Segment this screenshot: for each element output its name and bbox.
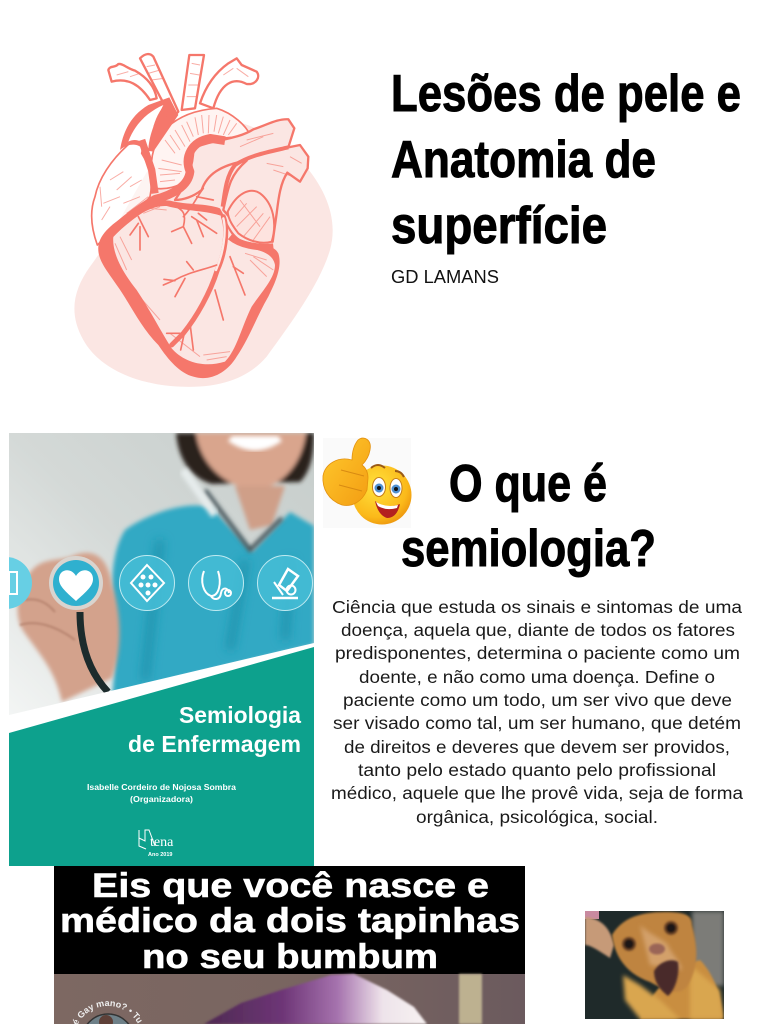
paragraph: definition of semiology: orgânica, psicológica, social. [416,807,658,827]
paragraph: definition of semiology: ser visado como tal, um ser humano, que detém [333,713,741,733]
meme caption: no seu bumbum [142,938,438,976]
heading: O que é semiologia [401,455,656,578]
meme caption panel [54,866,525,974]
heart illustration [74,54,333,387]
icon: left cropped circle [9,557,32,609]
dog muzzle shading [640,925,682,970]
dog eyes [622,921,678,951]
eyes [372,478,402,498]
title: superfície [391,197,607,255]
icon: microscope [258,556,312,610]
publisher logo [139,830,174,858]
paragraph: definition of semiology: paciente como um todo, um ser vivo que deve [343,690,732,710]
cover author: Isabelle Cordeiro de Nojosa Sombra [87,783,237,792]
thumb hand [323,438,370,505]
dog body [640,960,723,1019]
stethoscope tube [80,612,108,692]
heading: O que é semiologia: O que é [449,455,607,513]
title: Anatomia de [391,131,656,189]
cover photo background [9,433,314,723]
meme caption: médico da dois tapinhas [60,902,520,940]
eyebrows [371,465,404,477]
cover author [87,783,237,804]
white diagonal band [9,643,314,723]
paragraph: definition of semiology [331,597,743,827]
pulmonary trunk and left vessels [175,119,308,242]
cover title [128,702,301,757]
meme photo [54,974,525,1024]
title [391,65,741,255]
icon: pills [120,556,174,610]
hand [18,553,119,702]
ventricle wall [98,200,280,378]
paragraph: definition of semiology: de direitos e deveres que devem ser providos, [344,737,730,757]
nurse smile [228,436,282,450]
cover author: (Organizadora) [130,795,193,804]
teal panel [9,647,314,866]
meme caption: Eis que você nasce e [92,867,489,905]
central muscular band [105,138,225,240]
nurse hair and face [176,433,314,530]
publisher logo: Ano 2019 [148,852,172,858]
hatching [100,63,302,360]
icon: thumbs-up emoji [323,438,412,528]
heading: O que é semiologia: semiologia? [401,520,656,578]
paragraph: definition of semiology: doente, e não como uma doença. Define o [359,667,715,687]
dog paws [623,965,723,1019]
nurse uniform [112,505,314,695]
blob background [74,117,333,387]
paragraph: definition of semiology: médico, aquele que lhe provê vida, seja de forma [331,783,743,803]
icon: stethoscope [188,556,244,610]
meme caption [62,871,519,968]
cover title: Semiologia [179,702,301,728]
coronary arteries [130,188,245,350]
paragraph: definition of semiology: predisponentes, determina o paciente como um [335,643,740,663]
dog mouth [654,960,678,996]
paragraph: definition of semiology: Ciência que estuda os sinais e sintomas de uma [332,597,742,617]
book cover [0,433,314,866]
paragraph: definition of semiology: tanto pelo estado quanto pelo profissional [358,760,716,780]
publisher logo: tena [150,835,174,850]
cover title: de Enfermagem [128,731,301,757]
aortic arch [151,108,250,189]
dog photo [585,911,724,1019]
dog ear [585,917,614,958]
meme image [54,866,525,1024]
author: GD LAMANS [391,267,499,287]
dog head [612,912,696,992]
superior vena cava [120,97,178,152]
paragraph: definition of semiology: doença, aquela que, diante de todos os fatores [341,620,735,640]
great vessels [108,54,258,118]
right atrium [92,141,151,245]
left atrial appendage [228,191,274,243]
mouth [375,501,400,518]
stethoscope heart icon [49,556,103,610]
dog nose [649,944,665,954]
